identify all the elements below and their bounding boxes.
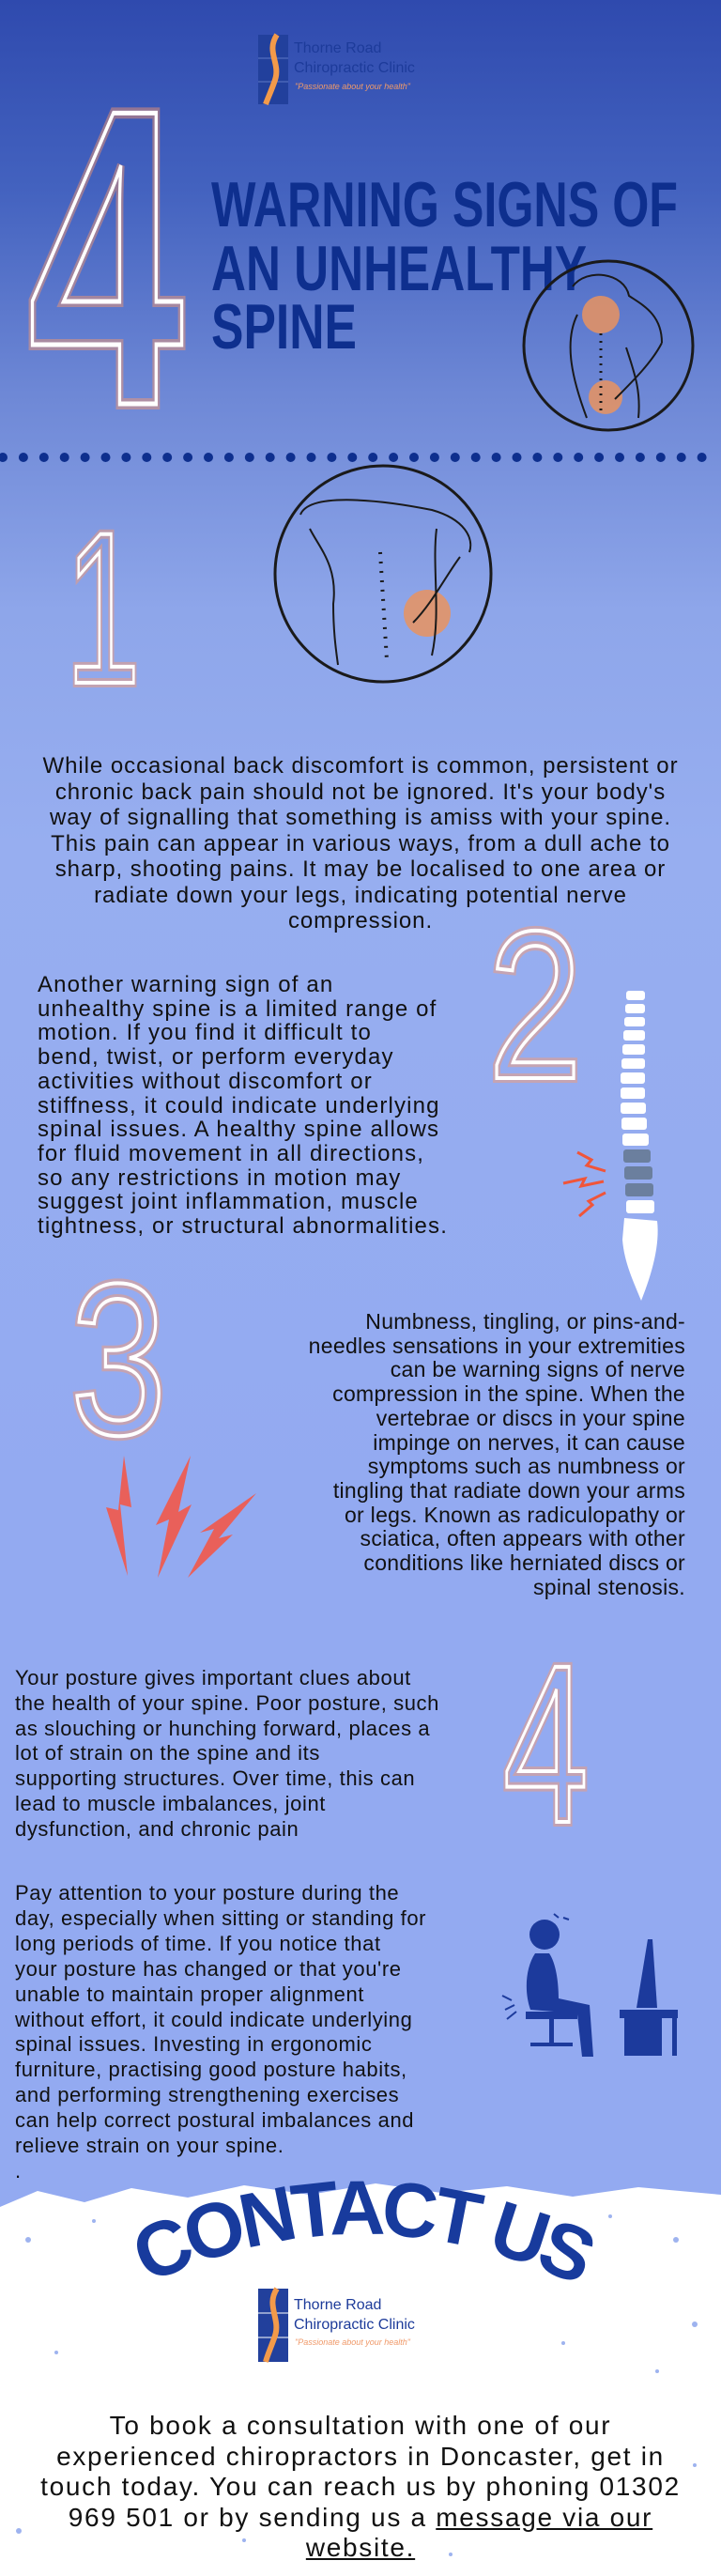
neon number 3: 3 — [70, 1239, 166, 1481]
text: sign 3 paragraph: or legs. Known as radiculopathy or — [345, 1503, 685, 1527]
text: contact paragraph: touch today. You can reach us by phoning 01302 — [40, 2472, 681, 2501]
text: sign 1 paragraph: While occasional back discomfort is common, persistent or — [42, 753, 679, 779]
text: sign 1 paragraph — [42, 753, 679, 933]
text: sign 3 paragraph: Numbness, tingling, or pins-and- — [365, 1309, 685, 1334]
text: sign 4 paragraph: dysfunction, and chronic pain — [15, 1817, 299, 1841]
divider: dotted line — [0, 453, 707, 462]
logo: top: Thorne Road — [294, 40, 381, 56]
logo: top: Chiropractic Clinic — [294, 60, 415, 76]
neon number 4: 4 — [503, 1619, 589, 1870]
logo: contact — [258, 2287, 415, 2363]
text: sign 2 paragraph: activities without discomfort or — [38, 1069, 373, 1094]
text: posture advice paragraph: day, especially when sitting or standing for — [15, 1906, 426, 1930]
text: contact paragraph: To book a consultation with one of our — [110, 2411, 611, 2440]
text: sign 1 paragraph: way of signalling that something is amiss with your spine. — [50, 805, 671, 830]
text: sign 3 paragraph: conditions like herniated discs or — [363, 1550, 685, 1575]
text: sign 2 paragraph: tightness, or structural abnormalities. — [38, 1213, 448, 1239]
heading: contact us: CONTACT US — [137, 2181, 593, 2280]
text: sign 1 paragraph: sharp, shooting pains. It may be localised to one area or — [55, 856, 666, 882]
title: SPINE — [211, 291, 357, 362]
text: posture advice paragraph: unable to maintain proper alignment — [15, 1982, 364, 2006]
text: sign 3 paragraph: symptoms such as numbness or — [368, 1454, 685, 1478]
text: sign 2 paragraph: motion. If you find it difficult to — [38, 1020, 372, 1045]
text: sign 2 paragraph: Another warning sign of an — [38, 972, 333, 997]
text: sign 3 paragraph — [309, 1309, 685, 1599]
title — [211, 169, 678, 362]
text: posture advice paragraph: Pay attention to your posture during the — [15, 1881, 399, 1905]
text: sign 4 paragraph — [15, 1666, 439, 1841]
text: sign 4 paragraph: as slouching or hunching forward, places a — [15, 1717, 430, 1740]
text: sign 2 paragraph: for fluid movement in all directions, — [38, 1141, 424, 1166]
text: sign 4 paragraph: lot of strain on the spine and its — [15, 1741, 320, 1765]
text: posture advice paragraph: . — [15, 2159, 22, 2183]
text: posture advice paragraph: without effort, it could indicate underlying — [15, 2008, 412, 2031]
white contact background — [0, 2183, 721, 2576]
title: AN UNHEALTHY — [211, 233, 587, 304]
text: sign 3 paragraph: tingling that radiate down your arms — [333, 1478, 685, 1503]
neon number 1: 1 — [66, 487, 140, 729]
text: sign 3 paragraph: needles sensations in your extremities — [309, 1334, 685, 1358]
big neon number 4: 4 — [28, 22, 185, 494]
text: contact paragraph — [40, 2411, 681, 2562]
text: posture advice paragraph: can help correct postural imbalances and — [15, 2108, 414, 2132]
icon: lightning bolts — [106, 1456, 256, 1578]
neon number 4: 4 — [503, 1619, 589, 1870]
icon: spine — [563, 991, 658, 1301]
logo: top — [258, 33, 415, 105]
text: contact paragraph: website. — [306, 2533, 415, 2562]
text: sign 3 paragraph: compression in the spine. When the — [332, 1381, 685, 1406]
text: sign 3 paragraph: vertebrae or discs in your spine — [376, 1406, 685, 1430]
logo: contact: "Passionate about your health" — [295, 2337, 411, 2347]
text: posture advice paragraph: spinal issues. Investing in ergonomic — [15, 2032, 372, 2056]
text: sign 4 paragraph: Your posture gives important clues about — [15, 1666, 411, 1689]
neon number 1: 1 — [66, 487, 140, 729]
text: posture advice paragraph: and performing strengthening exercises — [15, 2083, 399, 2106]
text: sign 4 paragraph: the health of your spine. Poor posture, such — [15, 1691, 439, 1715]
icon: back pain circle (header) — [522, 259, 695, 432]
text: sign 2 paragraph: so any restrictions in motion may — [38, 1165, 401, 1191]
text: posture advice paragraph: long periods of time. If you notice that — [15, 1932, 381, 1955]
icon: back pain circle 1 — [274, 464, 492, 684]
logo: contact: Chiropractic Clinic — [294, 2317, 415, 2333]
neon number 3: 3 — [70, 1239, 166, 1481]
text: sign 3 paragraph: spinal stenosis. — [533, 1575, 685, 1599]
text: sign 1 paragraph: radiate down your legs, indicating potential nerve — [94, 883, 627, 907]
text: posture advice paragraph — [15, 1881, 426, 2183]
text: posture advice paragraph: furniture, practising good posture habits, — [15, 2058, 407, 2081]
text: posture advice paragraph: relieve strain on your spine. — [15, 2134, 284, 2157]
text: sign 2 paragraph: suggest joint inflammation, muscle — [38, 1189, 419, 1214]
text: sign 2 paragraph: bend, twist, or perform everyday — [38, 1044, 394, 1070]
text: sign 1 paragraph: compression. — [288, 908, 433, 933]
text: sign 3 paragraph: sciatica, often appears with other — [360, 1526, 685, 1550]
text: contact paragraph: experienced chiropractors in Doncaster, get in — [56, 2442, 665, 2470]
neon number 2: 2 — [488, 888, 582, 1124]
neon number 2: 2 — [488, 888, 582, 1124]
text: sign 2 paragraph — [38, 972, 448, 1239]
text: sign 2 paragraph: spinal issues. A healthy spine allows — [38, 1117, 439, 1142]
text: sign 4 paragraph: lead to muscle imbalances, joint — [15, 1792, 326, 1815]
big neon number 4: 4 — [28, 22, 185, 494]
icon: person at desk — [501, 1913, 678, 2057]
text: sign 4 paragraph: supporting structures. Over time, this can — [15, 1766, 415, 1790]
text: sign 1 paragraph: This pain can appear in various ways, from a dull ache to — [51, 830, 670, 856]
text: sign 2 paragraph: stiffness, it could indicate underlying — [38, 1093, 440, 1118]
text: sign 3 paragraph: impinge on nerves, it can cause — [373, 1430, 685, 1455]
text: sign 2 paragraph: unhealthy spine is a limited range of — [38, 996, 437, 1022]
text: sign 1 paragraph: chronic back pain should not be ignored. It's your body's — [55, 779, 666, 804]
logo: contact: Thorne Road — [294, 2297, 381, 2313]
text: sign 3 paragraph: can be warning signs of nerve — [391, 1357, 685, 1381]
logo: top: "Passionate about your health" — [295, 82, 411, 91]
text: posture advice paragraph: your posture has changed or that you're — [15, 1957, 402, 1981]
text: contact paragraph: 969 501 or by sending us a message via our — [69, 2502, 652, 2532]
